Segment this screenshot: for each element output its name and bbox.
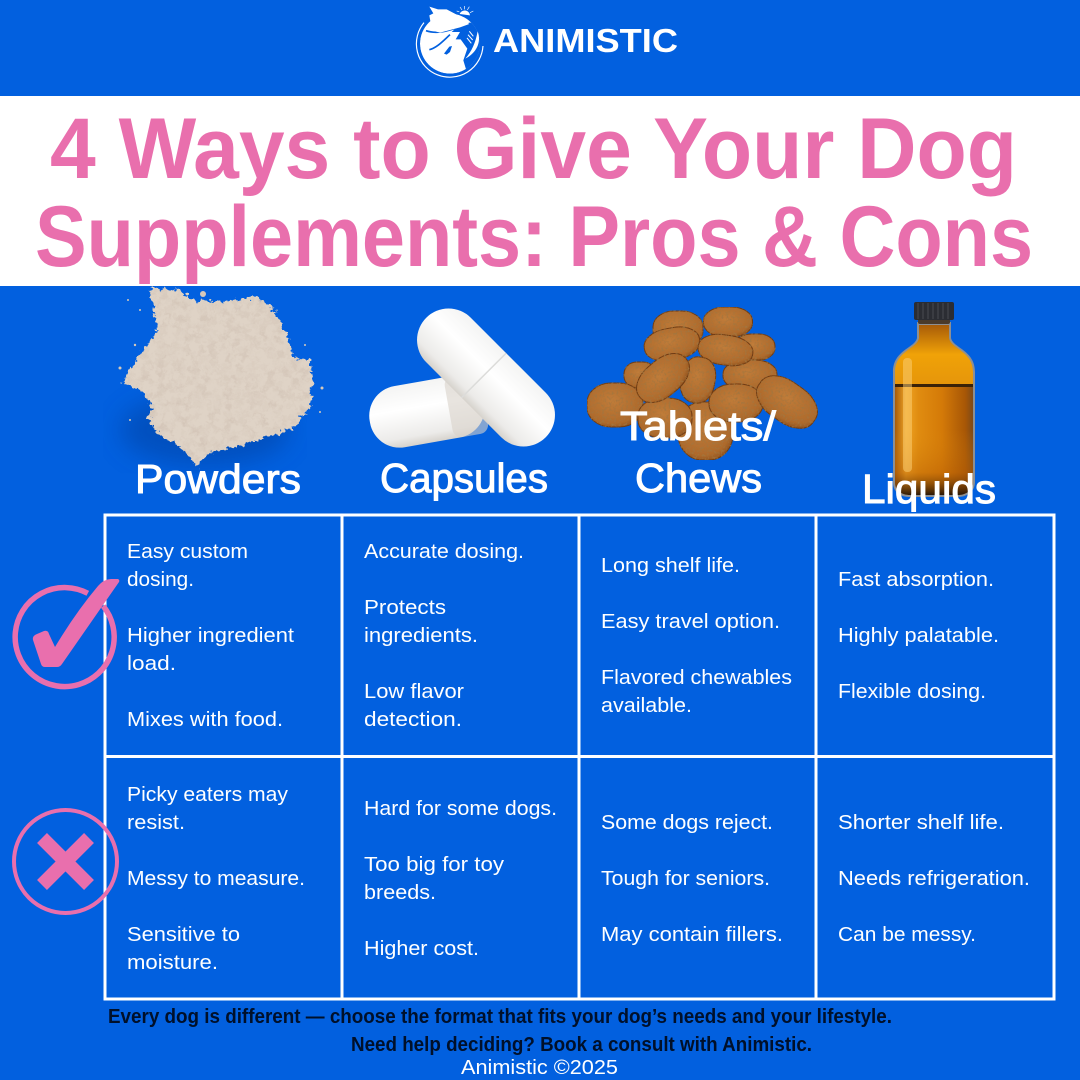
image: amber bottle: [893, 302, 975, 497]
cons: liquids: [838, 811, 1030, 946]
pros: powders: Higher ingredient: [127, 624, 294, 647]
title line 1: 4 Ways to Give Your Dog: [50, 101, 1017, 197]
pros: tablets and chews: Flavored chewables: [601, 666, 792, 689]
column heading: Capsules: Capsules: [380, 455, 548, 501]
cons: capsules: Hard for some dogs.: [364, 797, 557, 820]
cons: capsules: Higher cost.: [364, 937, 479, 960]
pros: powders: load.: [127, 652, 176, 675]
image: tablets and chews: [587, 307, 826, 460]
pros: powders: [127, 540, 294, 731]
image: capsules: [364, 295, 568, 460]
cons: tablets and chews: [601, 811, 783, 946]
column heading: Liquids: Liquids: [862, 466, 996, 512]
pros: capsules: [364, 540, 524, 731]
icon: check mark in circle: [15, 579, 119, 687]
pros: capsules: Protects: [364, 596, 446, 619]
image: powder pile: [118, 288, 324, 467]
column heading: Tablets/Chews: [620, 403, 777, 501]
cons: tablets and chews: Some dogs reject.: [601, 811, 773, 834]
pros: powders: Mixes with food.: [127, 708, 283, 731]
logo: Animistic: [416, 6, 678, 77]
logo wordmark: ANIMISTIC: [493, 22, 678, 59]
column heading: Tablets/Chews: Chews: [635, 455, 762, 501]
pros: capsules: Low flavor: [364, 680, 464, 703]
pros: powders: dosing.: [127, 568, 194, 591]
pros: tablets and chews: Easy travel option.: [601, 610, 780, 633]
cons: powders: moisture.: [127, 951, 218, 974]
cons: tablets and chews: Tough for seniors.: [601, 867, 770, 890]
cons: powders: Picky eaters may: [127, 783, 289, 806]
pros: liquids: Highly palatable.: [838, 624, 999, 647]
cons: powders: Messy to measure.: [127, 867, 305, 890]
cons: capsules: Too big for toy: [364, 853, 505, 876]
cons: liquids: Needs refrigeration.: [838, 867, 1030, 890]
pros: tablets and chews: [601, 554, 792, 717]
cons: powders: resist.: [127, 811, 185, 834]
cons: powders: [127, 783, 305, 974]
copyright: Animistic ©2025: [461, 1056, 618, 1079]
icon: cross in circle: [14, 810, 117, 913]
comparison table: [105, 515, 1054, 999]
cons: liquids: Shorter shelf life.: [838, 811, 1004, 834]
pros: capsules: detection.: [364, 708, 462, 731]
column heading: Powders: Powders: [135, 456, 301, 502]
column heading: Tablets/Chews: Tablets/: [620, 403, 777, 449]
cons: capsules: breeds.: [364, 881, 436, 904]
pros: capsules: ingredients.: [364, 624, 478, 647]
pros: liquids: Flexible dosing.: [838, 680, 986, 703]
pros: powders: Easy custom: [127, 540, 248, 563]
lower capsule: [364, 371, 489, 452]
cons: liquids: Can be messy.: [838, 923, 976, 946]
cons: powders: Sensitive to: [127, 923, 240, 946]
footer note line 2: Need help deciding? Book a consult with Animistic.: [351, 1034, 812, 1056]
footer note line 1: Every dog is different — choose the format that fits your dog’s needs and your lifestyle.: [108, 1006, 892, 1028]
upper capsule: [404, 295, 568, 460]
pros: capsules: Accurate dosing.: [364, 540, 524, 563]
pros: tablets and chews: Long shelf life.: [601, 554, 740, 577]
logo emblem: [416, 6, 487, 77]
cons: tablets and chews: May contain fillers.: [601, 923, 783, 946]
pros: liquids: [838, 568, 999, 703]
pros: tablets and chews: available.: [601, 694, 692, 717]
title band: [0, 96, 1080, 286]
pros: liquids: Fast absorption.: [838, 568, 994, 591]
cons: capsules: [364, 797, 557, 960]
